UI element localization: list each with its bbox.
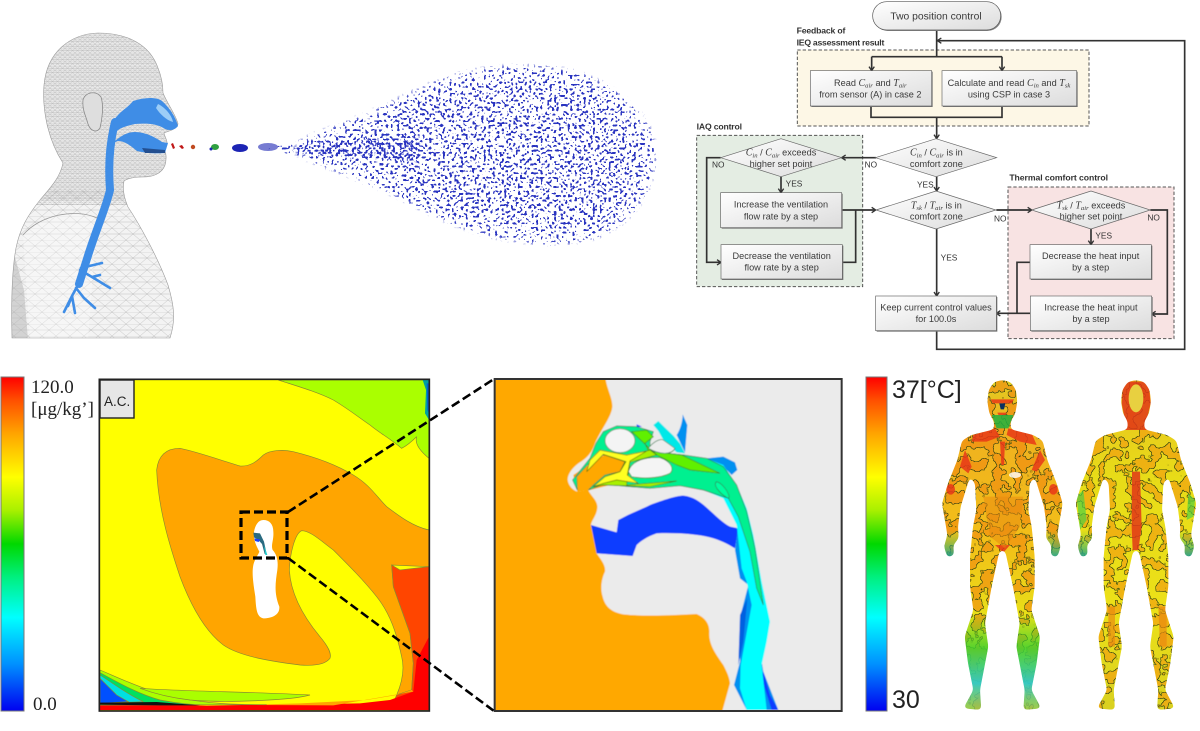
heading: feedback: IEQ assessment result [797,37,884,47]
colour bar: concentration [1,377,94,715]
decision: Tsk/Tair comfort: T [930,200,937,211]
box: calculate CSP [942,71,1078,107]
miniature airway [253,533,267,554]
decision: Cin/Cair comfort: / [922,148,929,158]
box: decrease ventilation: flow rate by a step [745,263,819,273]
lower left gradient wedge [100,670,267,705]
dense inner particle streak [248,130,425,168]
branch labels: NO [1147,212,1160,222]
blue oral cavity [591,496,738,556]
box: read sensor: air [899,83,907,90]
box: increase heat: by a step [1072,314,1110,324]
branch labels: NO [994,213,1007,223]
decision: Cin/Cair comfort [875,139,997,177]
temperature labels: 30 [892,686,920,714]
white body silhouette cut-out [253,520,279,618]
decision: Tsk/Tair set point: / [1068,200,1075,210]
branch labels: YES [786,178,803,188]
ear [83,93,103,131]
decision: Tsk/Tair set point: exceeds [1089,200,1126,210]
box: decrease heat: Decrease the heat input [1042,251,1140,261]
box: keep current values: for 100.0s [916,314,957,324]
inset frame [495,379,842,711]
panel frame [99,379,429,711]
start terminator [873,2,1002,31]
decision: Cin/Cair set point: higher set point [750,159,813,169]
box: calculate CSP: sk [1065,83,1071,90]
box: read sensor: Read C [834,78,865,89]
box: decrease ventilation [721,245,843,280]
decision: Tsk/Tair comfort [876,191,996,229]
box: read sensor: from sensor (A) in case 2 [819,89,921,99]
red bottom and corner [100,637,429,710]
box: calculate CSP: in [1034,83,1040,90]
box: increase ventilation: flow rate by a step [744,211,818,221]
panel: feedback of IEQ assessment result [797,50,1089,126]
panel: enlarged nasal and oral airway contour [495,379,842,711]
decision: Cin/Cair set point: C [746,148,753,159]
decision: Cin/Cair set point [721,139,842,177]
cyan pharynx ribbon [703,458,770,710]
decision: Cin/Cair comfort: comfort zone [910,159,963,169]
body: back view [1072,378,1200,712]
start terminator: Two position control [890,11,982,22]
decision: Tsk/Tair set point [1032,191,1150,229]
scale labels: 0.0 [33,694,57,715]
box: read sensor: and [873,78,893,88]
decision: Cin/Cair comfort: in [917,152,922,159]
green rear nasal flow [573,426,763,605]
decision: Cin/Cair comfort: air [936,152,944,159]
light green nasal streams [632,430,720,473]
box: keep current values [876,296,997,332]
box: increase heat [1030,296,1153,332]
heading: thermal comfort: Thermal comfort control [1009,173,1108,183]
box: decrease ventilation: Decrease the ventilation [733,251,831,261]
panel: thermal comfort control [1008,187,1174,339]
box: calculate CSP: using CSP in case 3 [968,89,1050,99]
green jaw and lower legs [992,415,1013,428]
orange core region [157,448,429,695]
hot zones front [946,399,1058,553]
orange nasal interior [573,454,627,492]
panel: room concentration contour A.C. [99,379,429,711]
branch labels: YES [917,179,934,189]
decision: Cin/Cair set point: / [758,148,765,158]
decision: Tsk/Tair comfort: sk [916,205,923,212]
pharynx side blue bands [637,414,778,710]
black lower edge streak [100,702,200,705]
box: increase ventilation: Increase the ventilation [734,200,828,210]
red-orange right region [390,565,429,710]
icon: blue airway model [64,98,178,313]
decision: Tsk/Tair set point: higher set point [1060,211,1123,221]
decision: Tsk/Tair comfort: is in [943,200,962,210]
panel: IAQ control [697,135,863,287]
box: increase heat: Increase the heat input [1044,302,1138,312]
flowchart: two position control [697,2,1185,349]
decision: Tsk/Tair comfort: air [935,205,943,212]
branch labels: YES [941,253,958,263]
orange head and neck region [495,379,730,711]
body: front view [938,378,1067,713]
blue edge strip [423,380,429,420]
box: read sensor: T [893,78,900,89]
box: calculate CSP: T [1059,78,1066,89]
decision: Cin/Cair comfort: C [910,148,917,159]
cyan top branch [653,421,685,453]
decision: Tsk/Tair comfort: / [922,200,930,210]
top right green region [278,380,429,458]
decision: Tsk/Tair set point: T [1057,200,1064,211]
hot zones back [1122,382,1151,550]
heading: feedback: Feedback of [797,26,845,36]
thermal body models [938,378,1200,713]
box: read sensor: air [865,83,873,90]
decision: Cin/Cair set point: exceeds [780,148,817,158]
decision: Tsk/Tair set point: T [1075,200,1082,211]
particle plume [171,50,672,259]
scale labels: 120.0 [31,377,74,398]
human head and torso mesh model [11,32,178,338]
decision: Tsk/Tair comfort: T [911,200,918,211]
cavity holes [605,429,635,453]
box: keep current values: Keep current control values [880,302,992,312]
dashed zoom box and leader lines [241,379,494,711]
green-yellow lens [140,688,310,701]
branch labels: YES [1095,231,1112,241]
branch labels: NO [712,160,725,170]
branch labels [712,160,1160,263]
decision: Cin/Cair comfort: C [929,148,936,159]
colour bar: skin temperature [866,376,962,714]
tag: A.C. [100,380,134,418]
decision: Cin/Cair set point: in [752,152,758,159]
box: decrease heat: by a step [1072,263,1109,273]
decision: Tsk/Tair set point: sk [1062,205,1069,212]
small early particles [171,143,278,152]
decision: Tsk/Tair set point: air [1081,205,1089,212]
box: read sensor [810,71,933,107]
heading: IAQ control: IAQ control [697,121,742,131]
branch labels: NO [865,160,878,170]
decision: Tsk/Tair comfort: comfort zone [910,211,963,221]
box: calculate CSP: and [1039,78,1059,88]
yellow nasal streams [587,450,647,487]
tag: A.C.: A.C. [104,394,130,409]
connector lines [707,30,1185,349]
box: calculate CSP: Calculate and read C [948,78,1034,89]
decision: Cin/Cair set point: air [772,152,780,159]
decision: Cin/Cair comfort: is in [944,148,963,158]
box: increase ventilation [721,193,843,229]
decision: Cin/Cair set point: C [765,148,772,159]
box: decrease heat [1030,245,1152,280]
scale labels: [μg/kg’] [31,399,94,420]
orange torso zone [983,497,1023,548]
temperature labels: 37[°C] [892,376,962,404]
